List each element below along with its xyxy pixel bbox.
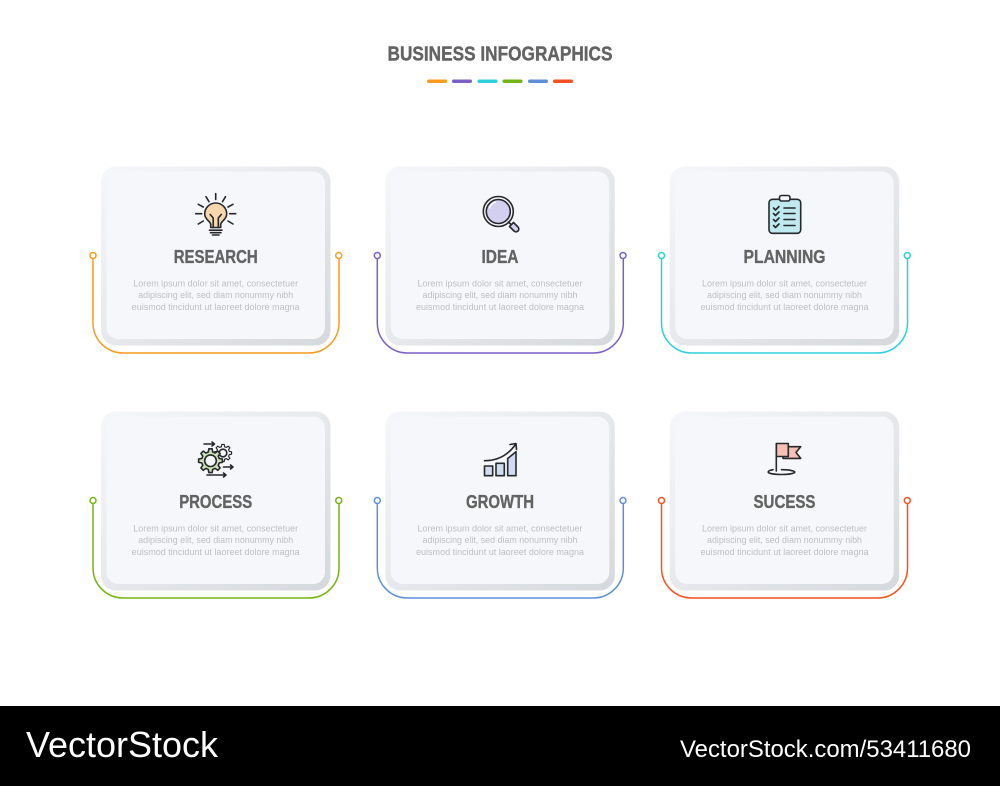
text block: [416, 278, 584, 312]
panel: planning: [658, 166, 910, 353]
footer url: VectorStock.com/53411680: [680, 736, 971, 763]
text block: Lorem ipsum dolor sit amet, consectetuer: [702, 524, 867, 534]
text block: adipiscing elit, sed diam nonummy nibh: [707, 535, 862, 545]
text block: adipiscing elit, sed diam nonummy nibh: [707, 290, 862, 300]
icon: clipboard checklist: [769, 196, 801, 233]
heading: SUCESS: [754, 492, 816, 512]
text block: adipiscing elit, sed diam nonummy nibh: [138, 535, 293, 545]
text block: Lorem ipsum dolor sit amet, consectetuer: [133, 524, 298, 534]
text block: euismod tincidunt ut laoreet dolore magna: [700, 547, 868, 557]
heading: PLANNING: [744, 247, 826, 267]
text block: Lorem ipsum dolor sit amet, consectetuer: [133, 278, 298, 288]
text block: euismod tincidunt ut laoreet dolore magna: [416, 302, 584, 312]
text block: Lorem ipsum dolor sit amet, consectetuer: [418, 524, 582, 534]
text block: euismod tincidunt ut laoreet dolore magna: [132, 547, 300, 557]
icon: growth chart: [484, 444, 516, 476]
icon: light bulb: [196, 194, 236, 235]
icon: flag: [768, 444, 801, 474]
text block: adipiscing elit, sed diam nonummy nibh: [422, 535, 578, 545]
text block: [132, 524, 300, 557]
text block: euismod tincidunt ut laoreet dolore magna: [700, 302, 868, 312]
panel: sucess: [658, 412, 910, 598]
panel: idea: [374, 166, 626, 353]
text block: euismod tincidunt ut laoreet dolore magna: [132, 302, 300, 312]
panel: research: [90, 166, 342, 353]
icon: magnifying glass: [483, 196, 519, 232]
text block: [132, 278, 300, 312]
text block: adipiscing elit, sed diam nonummy nibh: [138, 290, 293, 300]
panel: process: [90, 412, 342, 598]
heading: IDEA: [482, 247, 518, 267]
text block: [700, 524, 868, 557]
title: BUSINESS INFOGRAPHICS: [388, 44, 612, 66]
text block: [700, 278, 868, 312]
text block: Lorem ipsum dolor sit amet, consectetuer: [418, 278, 582, 288]
text block: euismod tincidunt ut laoreet dolore magna: [416, 547, 584, 557]
heading: GROWTH: [466, 492, 534, 512]
colour dash legend: [427, 80, 573, 83]
icon: gears and arrows: [199, 442, 233, 477]
text block: Lorem ipsum dolor sit amet, consectetuer: [702, 278, 867, 288]
footer logo: VectorStock: [26, 724, 219, 765]
footer bar: [0, 706, 1000, 786]
heading: RESEARCH: [174, 247, 258, 267]
heading: PROCESS: [179, 492, 252, 512]
text block: adipiscing elit, sed diam nonummy nibh: [422, 290, 578, 300]
panel: growth: [374, 412, 626, 598]
text block: [416, 524, 584, 557]
